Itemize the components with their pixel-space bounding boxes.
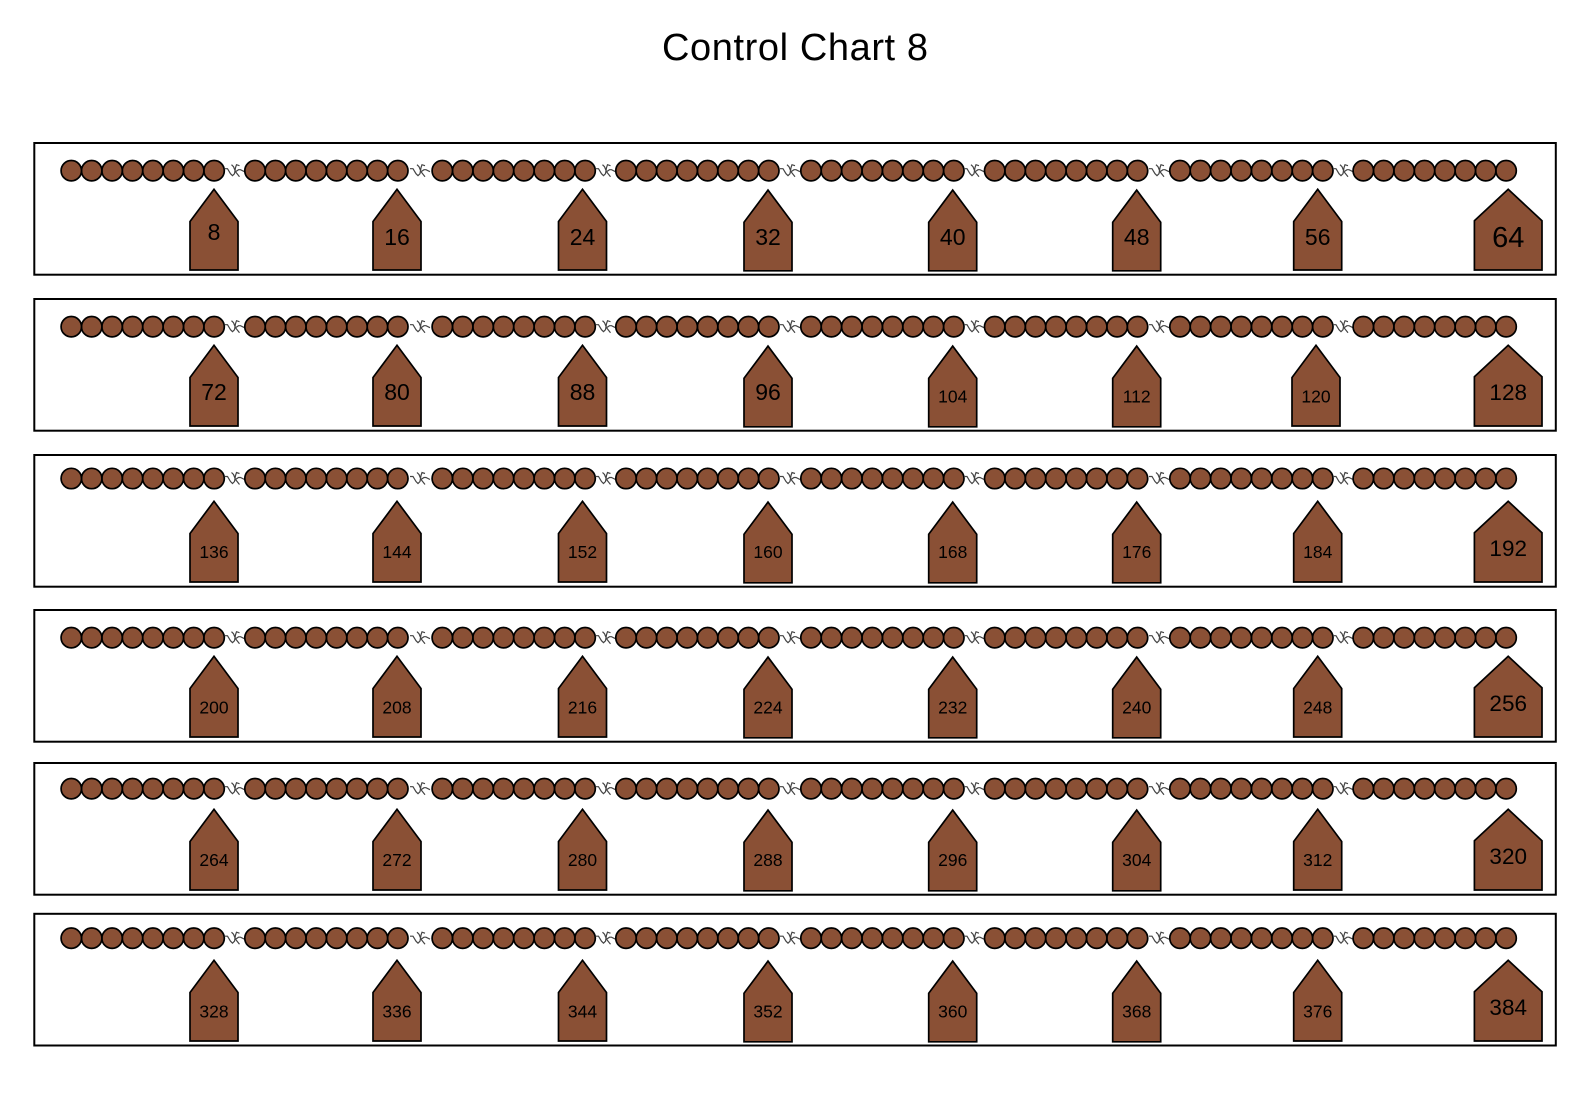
house 312: 312: [1303, 850, 1332, 870]
house 272: [373, 809, 421, 890]
house 376: [1294, 960, 1342, 1041]
panel: row 4 (200 to 256): [34, 610, 1556, 742]
panel: row 5 (264 to 320): [34, 763, 1556, 895]
house 88: [558, 345, 606, 426]
house 232: [929, 657, 977, 738]
house 384: 384: [1489, 995, 1527, 1020]
house 360: 360: [938, 1002, 968, 1022]
house 128: [1474, 345, 1542, 426]
house 32: 32: [755, 224, 781, 250]
house 24: [558, 189, 606, 270]
house 216: [558, 656, 606, 737]
house 192: [1474, 501, 1542, 582]
house 264: [190, 809, 238, 890]
house 280: [558, 809, 606, 890]
house 288: [744, 810, 792, 891]
house 56: [1294, 189, 1342, 270]
house 64: 64: [1492, 222, 1524, 254]
house 352: [744, 961, 792, 1042]
house 344: [558, 960, 606, 1041]
house 320: [1474, 809, 1542, 890]
house 48: 48: [1124, 224, 1149, 250]
house 288: 288: [753, 850, 783, 870]
house 168: [929, 502, 977, 583]
house 64: [1474, 189, 1542, 270]
house 200: [190, 656, 238, 737]
house 80: 80: [384, 379, 410, 405]
house 56: 56: [1305, 224, 1330, 250]
house 224: [744, 657, 792, 738]
house 144: 144: [382, 542, 412, 562]
house 120: 120: [1301, 387, 1331, 407]
house 8: [190, 189, 238, 270]
house 256: 256: [1489, 691, 1527, 716]
bead string row 5: [61, 778, 1516, 799]
house 16: 16: [384, 224, 410, 250]
house 328: [190, 960, 238, 1041]
house 184: [1294, 501, 1342, 582]
house 256: [1474, 656, 1542, 737]
house 128: 128: [1489, 380, 1527, 405]
house 96: [744, 346, 792, 427]
house 96: 96: [755, 379, 781, 405]
bead string row 2: [61, 316, 1516, 337]
house 104: [929, 346, 977, 427]
house 296: 296: [938, 850, 967, 870]
house 16: [373, 189, 421, 270]
bead string row 1: [61, 160, 1516, 181]
house 160: [744, 502, 792, 583]
panel: row 2 (72 to 128): [34, 299, 1556, 431]
house 152: 152: [568, 542, 597, 562]
house 120: [1292, 345, 1340, 426]
house 376: 376: [1303, 1002, 1332, 1022]
house 184: 184: [1303, 542, 1333, 562]
bead string row 3: [61, 468, 1516, 489]
house 72: 72: [201, 379, 227, 405]
house 328: 328: [199, 1002, 229, 1022]
house 40: [929, 190, 977, 271]
house 192: 192: [1489, 536, 1527, 561]
house 200: 200: [199, 698, 229, 718]
house 344: 344: [568, 1002, 597, 1022]
house 224: 224: [753, 698, 783, 718]
house 24: 24: [570, 224, 595, 250]
house 368: [1113, 961, 1161, 1042]
house 176: 176: [1122, 542, 1151, 562]
house 32: [744, 190, 792, 271]
house 80: [373, 345, 421, 426]
house 136: 136: [199, 542, 229, 562]
house 352: 352: [753, 1002, 783, 1022]
house 208: 208: [382, 698, 412, 718]
house 248: [1294, 656, 1342, 737]
house 144: [373, 501, 421, 582]
bead string row 4: [61, 628, 1516, 648]
house 280: 280: [568, 850, 597, 870]
house 304: [1113, 810, 1161, 891]
title: Control Chart 8: [662, 27, 928, 69]
house 240: 240: [1122, 698, 1152, 718]
house 152: [558, 501, 606, 582]
house 320: 320: [1489, 844, 1527, 869]
house 88: 88: [570, 379, 595, 405]
panel: row 3 (136 to 192): [34, 455, 1556, 587]
house 112: [1113, 346, 1161, 427]
house 360: [929, 961, 977, 1042]
house 336: 336: [382, 1002, 412, 1022]
house 176: [1113, 502, 1161, 583]
panel: row 6 (328 to 384): [34, 914, 1556, 1046]
house 248: 248: [1303, 698, 1332, 718]
house 368: 368: [1122, 1002, 1151, 1022]
house 264: 264: [199, 850, 229, 870]
house 112: 112: [1123, 387, 1151, 407]
house 48: [1113, 190, 1161, 271]
bead string row 6: [61, 928, 1516, 948]
house 312: [1294, 809, 1342, 890]
house 104: 104: [938, 387, 968, 407]
house 296: [929, 810, 977, 891]
house 160: 160: [753, 542, 783, 562]
house 384: [1474, 960, 1542, 1041]
house 216: 216: [568, 698, 597, 718]
panel: row 1 (8 to 64): [34, 143, 1556, 275]
house 168: 168: [938, 542, 967, 562]
house 304: 304: [1122, 850, 1152, 870]
house 232: 232: [938, 698, 967, 718]
house 272: 272: [382, 850, 412, 870]
house 136: [190, 501, 238, 582]
house 8: 8: [208, 219, 220, 245]
house 40: 40: [940, 224, 965, 250]
house 336: [373, 960, 421, 1041]
house 208: [373, 656, 421, 737]
house 72: [190, 345, 238, 426]
house 240: [1113, 657, 1161, 738]
